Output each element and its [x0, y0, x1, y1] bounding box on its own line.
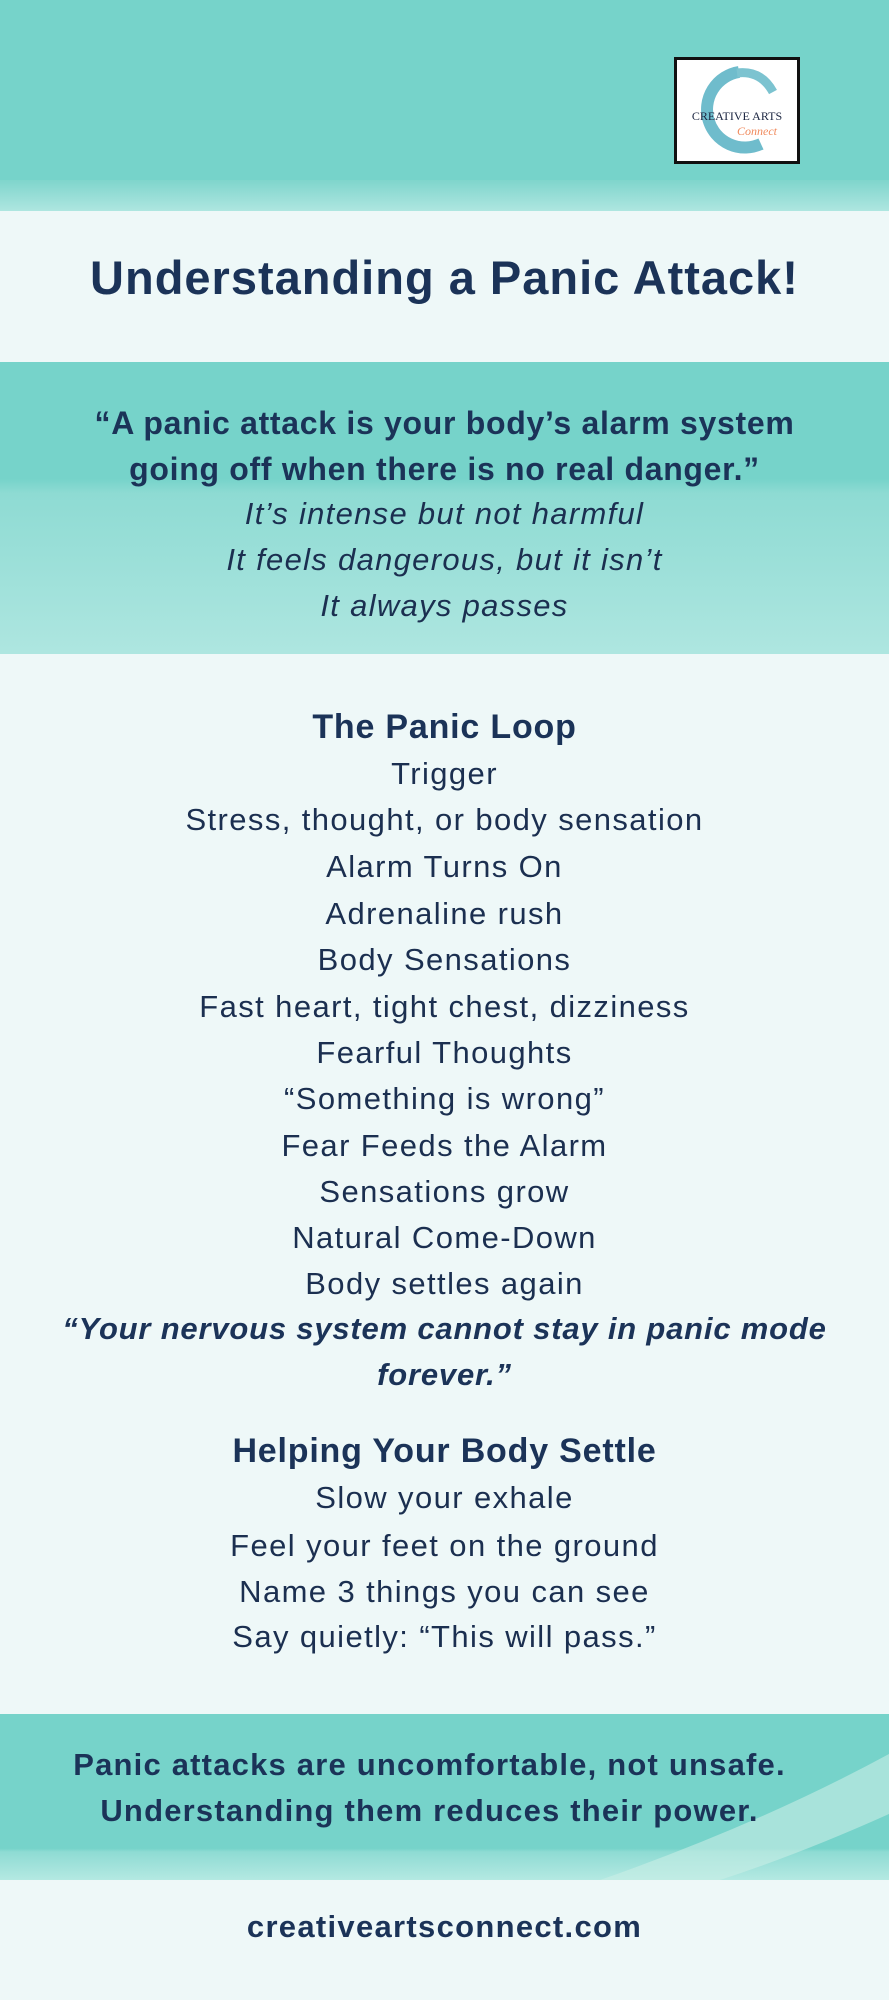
closing message: Panic attacks are uncomfortable, not unsafe.	[73, 1747, 786, 1782]
panic loop section: Stress, thought, or body sensation	[185, 802, 704, 837]
bottom band: Understanding them reduces their power.	[100, 1793, 759, 1828]
heading: The Panic Loop	[312, 708, 577, 746]
logo: Connect	[737, 124, 778, 138]
panic loop section: Alarm Turns On	[326, 849, 563, 884]
header band	[0, 0, 889, 180]
quote band: It always passes	[320, 588, 569, 623]
panic loop section	[185, 708, 704, 1301]
quote subtext: It’s intense but not harmful	[245, 496, 644, 531]
panic loop section: Adrenaline rush	[325, 896, 564, 931]
italic quote: “Your nervous system cannot stay in panic mode	[62, 1311, 827, 1346]
panic loop section: Body settles again	[305, 1266, 584, 1301]
helping section: Helping Your Body Settle	[232, 1432, 657, 1470]
logo: CREATIVE ARTS	[692, 109, 782, 123]
logo	[674, 57, 800, 164]
helping section: Slow your exhale	[315, 1480, 574, 1515]
helping section: Feel your feet on the ground	[230, 1528, 659, 1563]
panic loop section: Body Sensations	[318, 942, 571, 977]
helping section: Name 3 things you can see	[239, 1574, 650, 1609]
panic loop section: Fear Feeds the Alarm	[281, 1128, 608, 1163]
quote band: It feels dangerous, but it isn’t	[226, 542, 663, 577]
title: Understanding a Panic Attack!	[90, 251, 799, 304]
helping section	[230, 1432, 659, 1654]
panic loop section: Natural Come-Down	[292, 1220, 597, 1255]
helping section: Say quietly: “This will pass.”	[232, 1619, 657, 1654]
footer url: creativeartsconnect.com	[247, 1909, 642, 1944]
panic loop section: Fearful Thoughts	[316, 1035, 573, 1070]
panic loop section: “Something is wrong”	[284, 1081, 605, 1116]
quote band	[0, 362, 889, 654]
panic loop section: Fast heart, tight chest, dizziness	[199, 989, 690, 1024]
quote band: going off when there is no real danger.”	[129, 451, 760, 487]
bottom band	[0, 1714, 889, 1880]
text: forever.”	[377, 1357, 512, 1392]
panic loop section: Sensations grow	[319, 1174, 570, 1209]
panic loop section: Trigger	[391, 756, 498, 791]
quote: “A panic attack is your body’s alarm system	[94, 405, 794, 441]
